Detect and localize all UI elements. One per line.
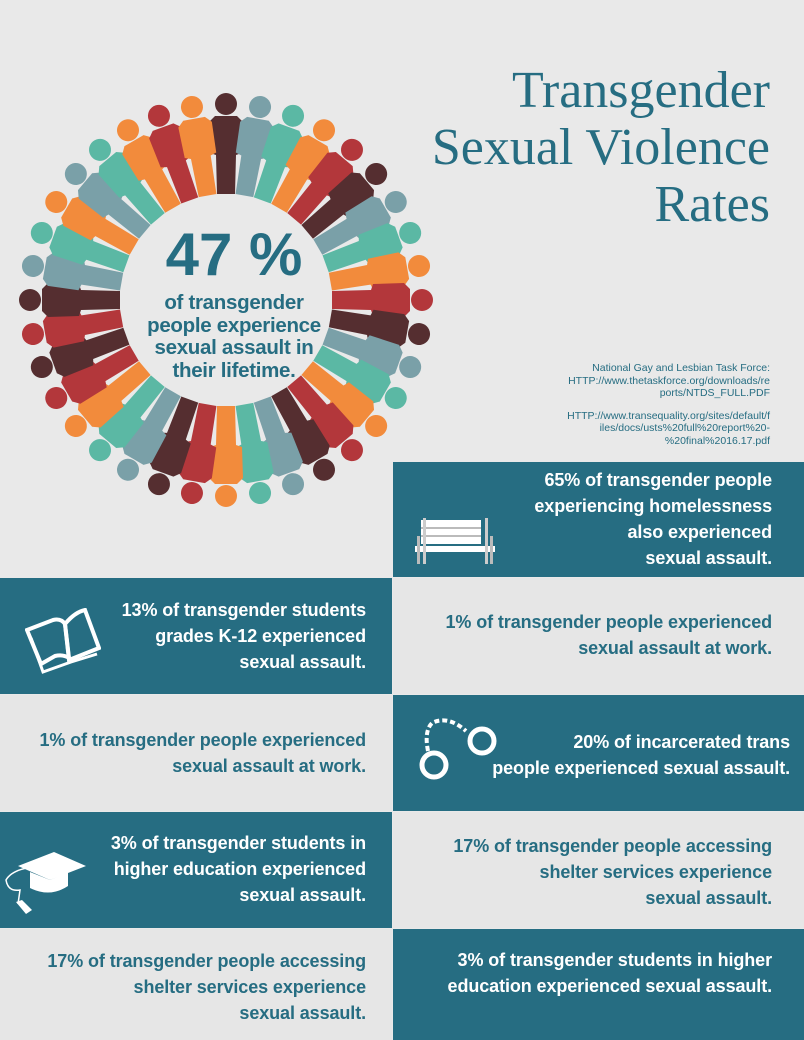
panel: shelter left: 17% of transgender people accessing <box>47 951 366 971</box>
sources: HTTP://www.thetaskforce.org/downloads/re <box>568 374 770 386</box>
icon: graduation cap <box>5 852 86 914</box>
icon: handcuffs <box>420 718 496 780</box>
icon: book <box>25 608 101 674</box>
text: 3% of transgender students in <box>111 833 366 853</box>
panel: shelter left: sexual assault. <box>239 1003 366 1023</box>
headline stat: people experience <box>147 314 321 336</box>
text: people experienced sexual assault. <box>492 758 790 778</box>
text: sexual assault. <box>239 652 366 672</box>
panel: higher education right <box>393 929 804 1040</box>
icon: bench <box>415 518 495 564</box>
panel: higher education right: education experienced sexual assault. <box>448 976 772 996</box>
text: higher education experienced <box>114 859 366 879</box>
text <box>534 470 772 568</box>
panel: K-12 <box>0 578 392 694</box>
sources: ports/NTDS_FULL.PDF <box>660 387 770 399</box>
panel: work right <box>393 578 804 694</box>
panel: shelter right: sexual assault. <box>645 888 772 908</box>
headline stat <box>147 221 321 382</box>
text <box>122 600 366 672</box>
panel: shelter left <box>0 929 392 1040</box>
title <box>432 62 770 233</box>
text: sexual assault. <box>645 548 772 568</box>
headline stat: of transgender <box>164 291 304 314</box>
sources: HTTP://www.transequality.org/sites/default/f <box>567 410 770 422</box>
sources <box>567 362 770 446</box>
sources: iles/docs/usts%20full%20report%20- <box>600 422 770 434</box>
panel: higher education left <box>0 812 392 928</box>
panel: work left: 1% of transgender people experienced <box>40 730 366 750</box>
text: experiencing homelessness <box>534 496 772 516</box>
people circle <box>19 93 433 507</box>
title: Sexual Violence <box>432 119 770 176</box>
panel: higher education right: 3% of transgender students in higher <box>458 950 772 970</box>
panel: shelter left: shelter services experience <box>134 977 366 997</box>
text: 13% of transgender students <box>122 600 366 620</box>
title: Transgender <box>512 62 770 119</box>
text <box>492 732 790 778</box>
panel: incarcerated <box>393 695 804 811</box>
panel: work right: 1% of transgender people experienced <box>446 612 772 632</box>
text <box>111 833 366 905</box>
text: grades K-12 experienced <box>155 626 366 646</box>
headline stat: 47 % <box>166 221 302 288</box>
text: 65% of transgender people <box>544 470 772 490</box>
text: also experienced <box>628 522 772 542</box>
title: Rates <box>654 176 770 233</box>
sources: National Gay and Lesbian Task Force: <box>592 362 770 374</box>
headline stat: their lifetime. <box>172 358 296 382</box>
text: sexual assault. <box>239 885 366 905</box>
text: 20% of incarcerated trans <box>573 732 790 752</box>
panel: shelter right: shelter services experience <box>540 862 772 882</box>
panel: shelter right: 17% of transgender people accessing <box>453 836 772 856</box>
panel: work right: sexual assault at work. <box>578 638 772 658</box>
panel: homelessness <box>393 462 804 577</box>
sources: %20final%2016.17.pdf <box>665 434 770 446</box>
panel: work left: sexual assault at work. <box>172 756 366 776</box>
headline stat: sexual assault in <box>154 336 313 359</box>
panel: shelter right <box>393 812 804 928</box>
panel: work left <box>0 695 392 811</box>
